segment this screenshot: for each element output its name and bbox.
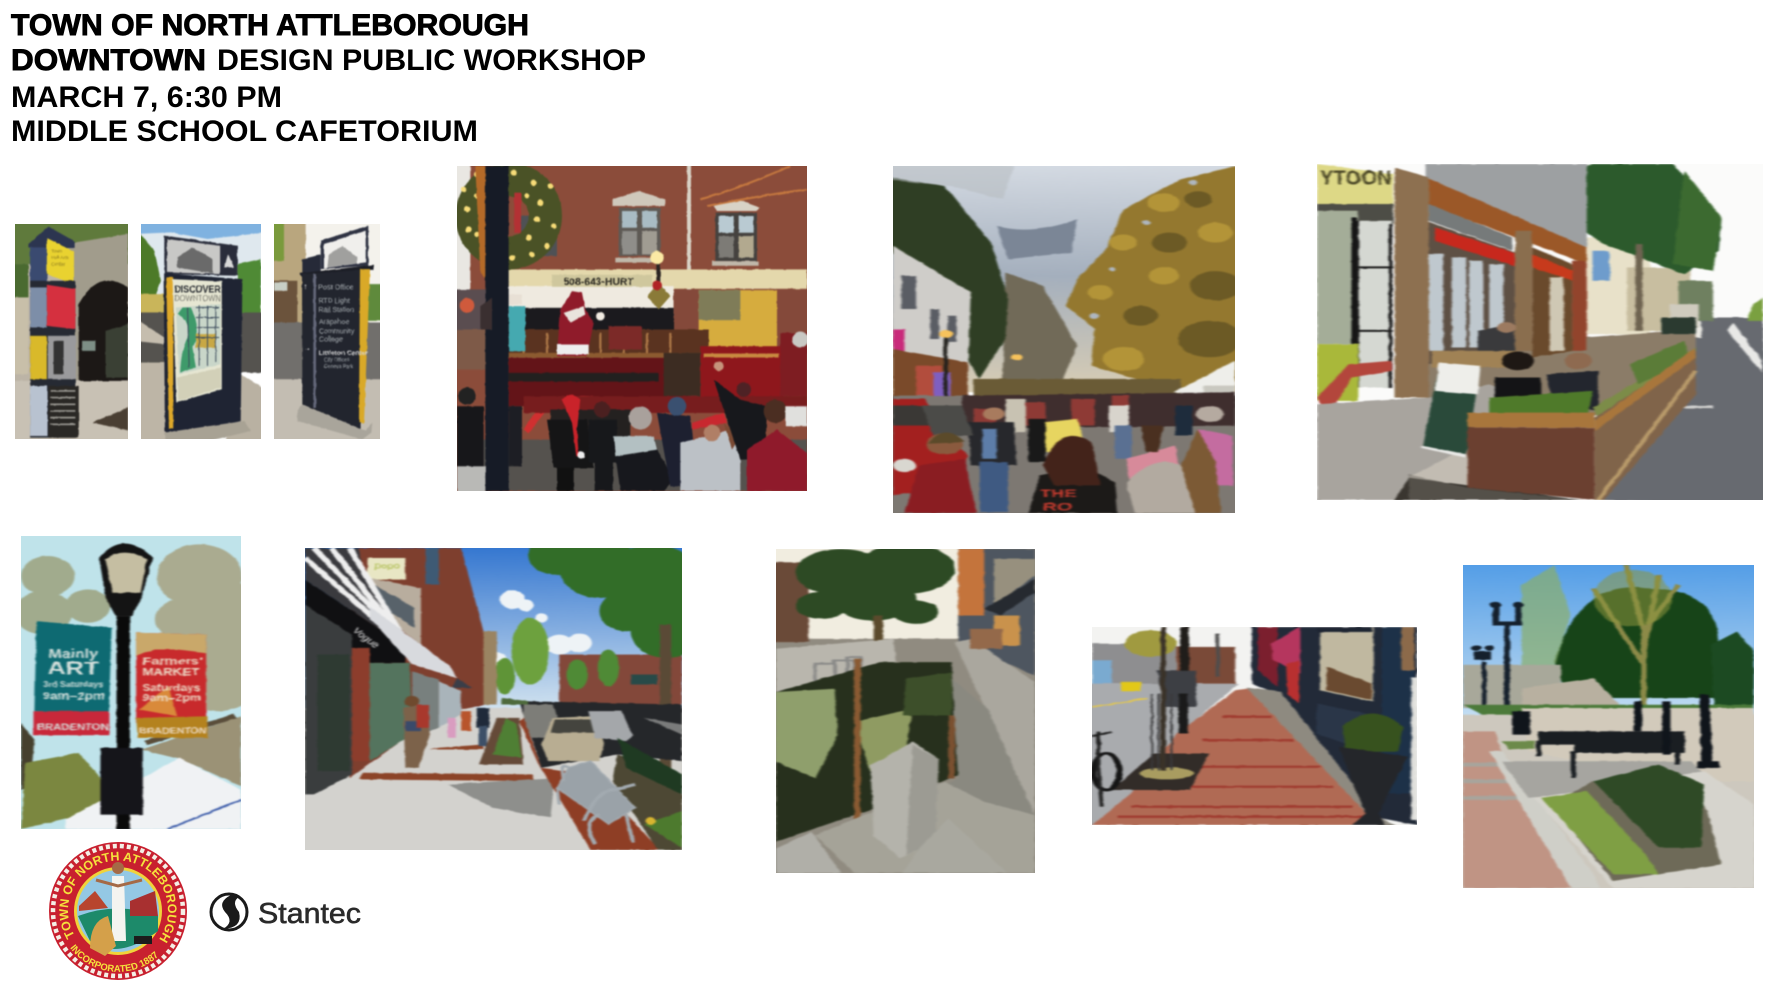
doorway — [1317, 211, 1357, 344]
road — [1085, 684, 1239, 830]
map panel: DOWNTOWN — [174, 293, 221, 303]
title — [11, 9, 646, 148]
left building — [893, 246, 971, 372]
sign directions: Rail Station — [318, 307, 354, 314]
sign pillar: Hall Arts — [51, 255, 69, 260]
sign pillar: Center — [51, 262, 66, 267]
brick building — [350, 548, 486, 778]
tent — [66, 758, 241, 829]
sign directions: Post Office — [318, 282, 354, 291]
trees — [1558, 164, 1722, 274]
lamps — [1471, 602, 1524, 735]
people & A-frame — [1478, 324, 1518, 364]
sidewalk — [305, 708, 568, 850]
sign directions: Community — [319, 328, 355, 336]
photo: streetscape with bench — [305, 548, 682, 850]
brick strip — [519, 718, 660, 850]
map panel — [173, 279, 222, 403]
sign pillar: Town — [51, 248, 63, 253]
sign directions: Geneva Park — [324, 364, 354, 370]
brick walk — [1092, 689, 1379, 825]
planter — [1409, 341, 1696, 500]
banner: Farmers' Market — [136, 633, 208, 738]
granite posts — [776, 742, 1007, 873]
green tree left — [881, 176, 1008, 379]
sidewalk — [955, 639, 1035, 815]
sign directions — [303, 282, 368, 370]
sign directions: College — [319, 337, 343, 344]
garden — [776, 662, 958, 842]
logo: Stantec: Stantec — [258, 898, 361, 930]
logo: Stantec — [211, 894, 361, 930]
clouds — [482, 590, 592, 671]
banner: Mainly Art: BRADENTON — [37, 723, 108, 733]
sign directions: Littleton Center — [319, 350, 368, 357]
title: MIDDLE SCHOOL CAFETORIUM — [11, 115, 478, 148]
photo: lamp post banners — [21, 536, 241, 829]
photo: holiday fire truck parade — [457, 166, 807, 491]
far buildings — [1587, 237, 1650, 334]
photo: parklet cafe — [1317, 164, 1763, 500]
title: MARCH 7, 6:30 PM — [11, 81, 282, 114]
cars — [524, 704, 633, 761]
sign pillar — [28, 227, 79, 438]
photo: crowded street festival: THE — [1040, 488, 1077, 500]
parade crowd — [457, 361, 807, 493]
patio ground — [1426, 329, 1696, 418]
ground — [1463, 705, 1754, 725]
yellow sign: YTOON — [1320, 167, 1392, 189]
awnings — [305, 548, 405, 646]
right bed — [613, 754, 682, 850]
banner: Mainly Art — [33, 621, 112, 735]
planting bed — [1541, 765, 1721, 881]
photo: streetscape with bench: Vogue — [349, 626, 382, 651]
tree grate — [1112, 753, 1209, 790]
tree canopy — [796, 544, 955, 624]
sign directions: → — [303, 343, 311, 352]
title: TOWN OF NORTH ATTLEBOROUGH — [11, 9, 529, 42]
far buildings right — [559, 655, 682, 704]
lamp post — [99, 544, 153, 830]
foreground people — [905, 459, 976, 513]
far trees — [1554, 587, 1724, 698]
sign directions: City Offices — [324, 358, 350, 364]
banner: Mainly Art: ART — [48, 658, 100, 679]
street trees — [512, 618, 549, 685]
road — [1598, 317, 1770, 504]
sign directions: Arapahoe — [319, 319, 349, 326]
banner: Farmers' Market: BRADENTON — [139, 727, 207, 736]
yellow sign — [1317, 164, 1393, 224]
road — [776, 639, 896, 692]
bench — [1536, 731, 1685, 778]
bollards — [1512, 695, 1719, 768]
lamp post with banner — [475, 166, 509, 491]
photo: rain garden sidewalk — [776, 549, 1035, 873]
sign directions: RTD Light — [318, 298, 350, 305]
red car — [893, 399, 968, 495]
title: DESIGN PUBLIC WORKSHOP — [217, 44, 646, 77]
banner: Mainly Art: Mainly — [49, 647, 98, 661]
wreath — [461, 170, 556, 261]
logo: town seal — [49, 842, 187, 980]
stone pillar — [1394, 167, 1429, 398]
storefront — [305, 605, 352, 794]
seal lettering: INCORPORATED 1887 — [70, 944, 157, 972]
banner: Farmers' Market: Saturdays — [142, 682, 201, 694]
bare trees — [1002, 272, 1077, 386]
pedestrians — [403, 696, 489, 768]
storefronts — [1252, 627, 1417, 825]
photo: crowded street festival: RO — [1043, 501, 1072, 514]
sign directions: ↑ — [303, 282, 307, 291]
big tree — [528, 535, 702, 658]
banner: Farmers' Market: MARKET — [142, 666, 200, 678]
sidewalk — [1317, 384, 1524, 500]
map panel: DISCOVER — [174, 284, 221, 295]
photo: history pillar sign — [15, 224, 128, 439]
banner: Farmers' Market: Farmers' — [142, 655, 203, 667]
fire truck — [457, 330, 808, 491]
photo: holiday fire truck parade: 508-643-HURT — [564, 277, 634, 288]
banner: Farmers' Market: 9am–2pm — [142, 692, 201, 704]
slim tree — [1593, 565, 1678, 791]
banner: Mainly Art: 9am–2pm — [42, 689, 105, 702]
bench — [557, 761, 635, 844]
santa — [509, 291, 605, 356]
autumn tree right — [1066, 166, 1250, 392]
planter — [479, 718, 524, 764]
photo: plaza with benches — [1463, 565, 1754, 888]
storefront — [1426, 164, 1587, 247]
seal lettering: TOWN OF NORTH ATTLEBOROUGH — [59, 852, 177, 944]
road — [519, 701, 682, 768]
bicycle — [1092, 732, 1119, 807]
photo: crowded street festival — [893, 166, 1235, 514]
photo: discover downtown map sign — [141, 224, 261, 439]
photo: streetscape with bench: popo — [374, 562, 400, 571]
crowd — [881, 396, 1250, 519]
photo: brick sidewalk with planter — [1092, 627, 1417, 825]
banner: Mainly Art: 3rd Saturdays — [43, 680, 104, 689]
urn planter — [1339, 714, 1408, 825]
photo: wayfinding sign — [274, 224, 380, 439]
tent — [1173, 361, 1235, 396]
window group — [520, 191, 760, 266]
title: DOWNTOWN — [11, 44, 206, 77]
